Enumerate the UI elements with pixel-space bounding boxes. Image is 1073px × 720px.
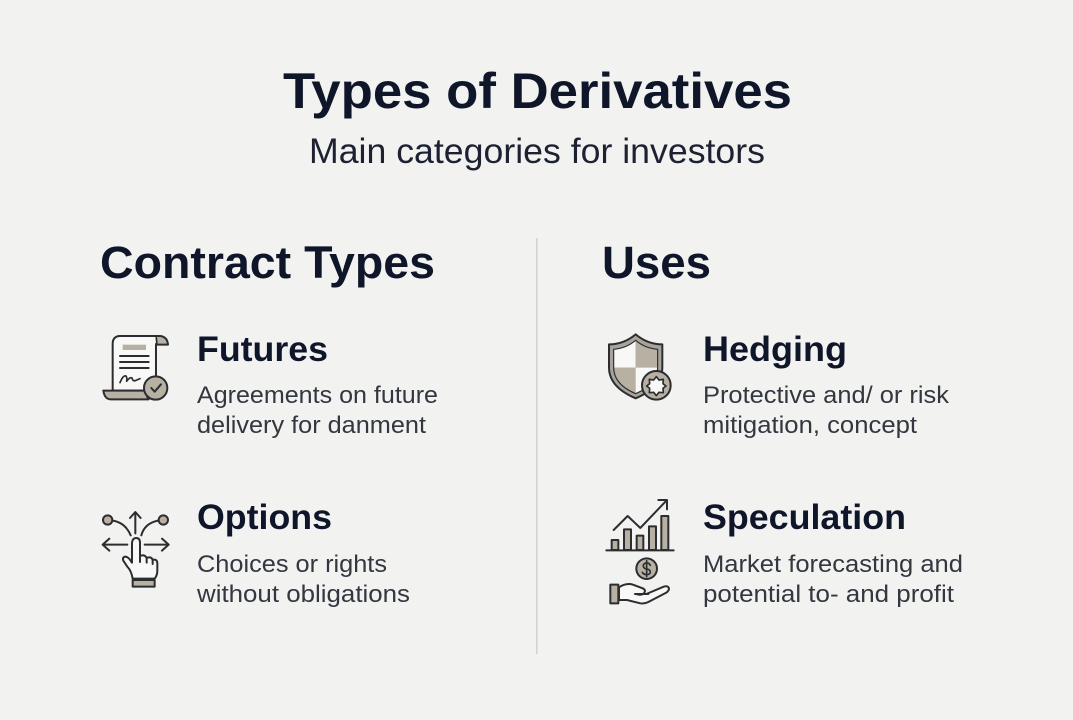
heading: options: Options [197, 498, 332, 537]
text: hedging description: mitigation, concept [703, 412, 917, 439]
heading: uses: Uses [602, 237, 711, 288]
text: options description: without obligations [196, 581, 410, 608]
text: speculation description [703, 551, 963, 608]
text: hedging description [703, 382, 950, 439]
item: hedging [609, 330, 950, 439]
text: options description: Choices or rights [197, 551, 387, 578]
icon: growth chart and coin in hand [606, 500, 674, 603]
heading: speculation: Speculation [703, 498, 906, 537]
icon: shield [609, 334, 671, 400]
text: speculation description: Market forecasting and [703, 551, 963, 578]
subtitle: Main categories for investors [309, 132, 765, 171]
heading: hedging: Hedging [703, 330, 847, 369]
icon: contract scroll [103, 336, 168, 400]
text: futures description [197, 382, 438, 439]
title: Types of Derivatives [283, 63, 792, 119]
item: futures [103, 330, 438, 439]
heading: futures: Futures [197, 330, 328, 369]
item: speculation [606, 498, 963, 608]
heading: contract types: Contract Types [100, 237, 435, 288]
icon: pointing hand with arrows [103, 512, 169, 587]
text: hedging description: Protective and/ or risk [703, 382, 950, 409]
text: futures description: Agreements on future [197, 382, 438, 409]
text: futures description: delivery for danment [197, 412, 426, 439]
text: speculation description: potential to- and profit [703, 581, 954, 608]
panel: uses [602, 237, 963, 608]
item: options [103, 498, 410, 608]
text: options description [196, 551, 410, 608]
panel: contract types [100, 237, 438, 608]
